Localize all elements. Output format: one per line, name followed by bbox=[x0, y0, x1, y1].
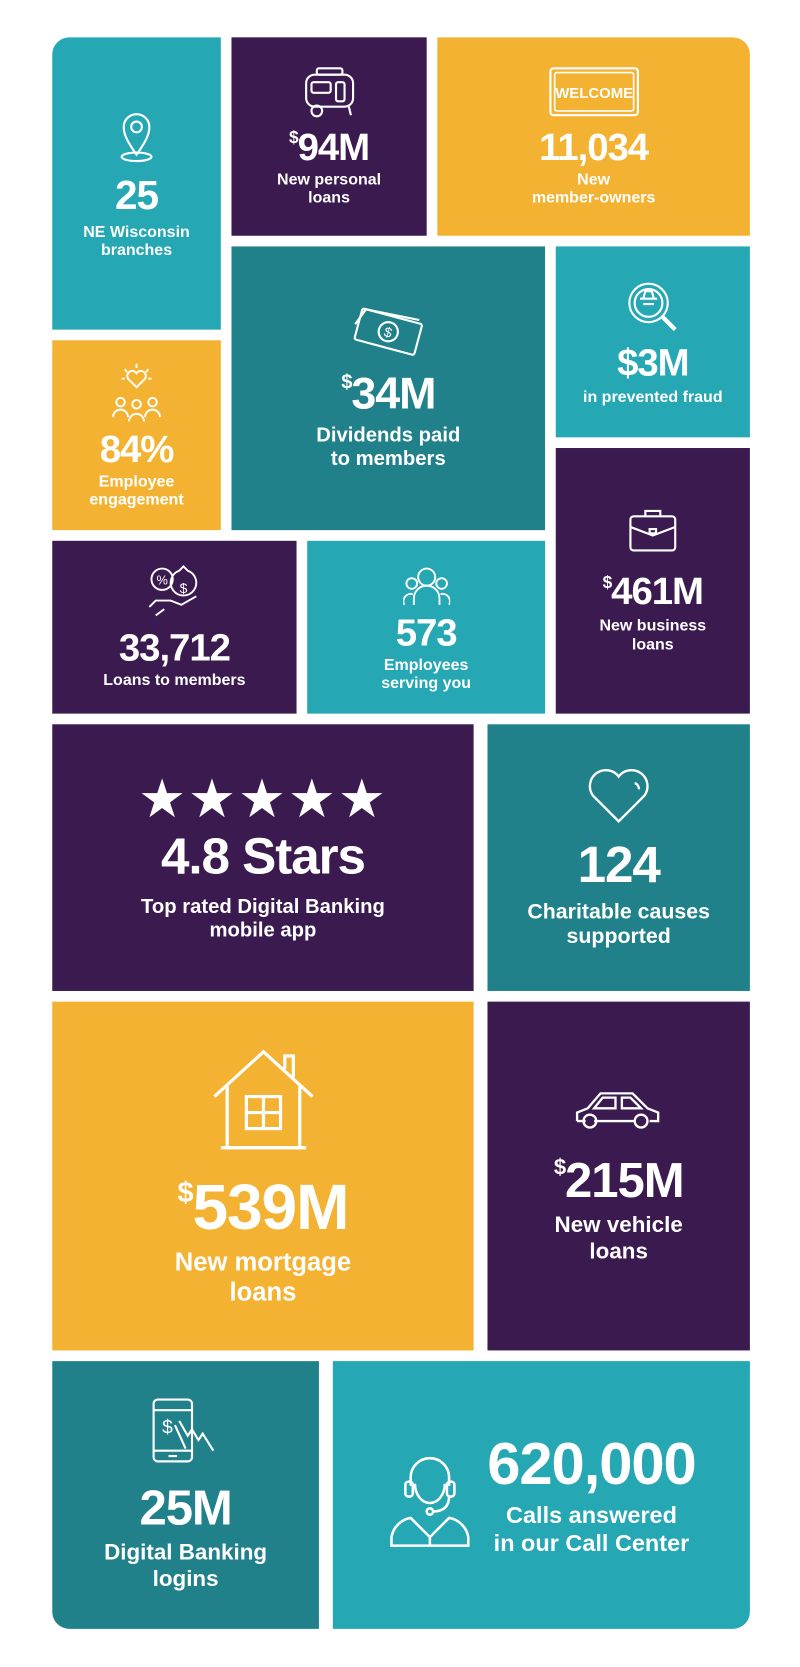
number: 33,712: 33,712 bbox=[119, 625, 230, 669]
icon: house bbox=[213, 1050, 314, 1150]
number: $94M: $94M bbox=[289, 125, 369, 168]
number: 573: 573 bbox=[396, 610, 457, 654]
panel: charitable causes bbox=[487, 724, 750, 991]
label: New personal bbox=[277, 170, 381, 189]
panel: digital logins bbox=[52, 1361, 319, 1629]
icon: camper bbox=[305, 67, 354, 118]
label: supported bbox=[567, 925, 671, 948]
label: Charitable causes bbox=[527, 900, 710, 924]
label: engagement bbox=[89, 491, 184, 509]
icon: heart bbox=[588, 769, 649, 823]
label: Top rated Digital Banking bbox=[141, 896, 385, 919]
label: New mortgage bbox=[175, 1248, 351, 1277]
icon: briefcase bbox=[629, 510, 676, 552]
number: $3M: $3M bbox=[617, 340, 689, 384]
text block bbox=[487, 1430, 696, 1556]
label: New business bbox=[599, 617, 706, 635]
panel: business loans bbox=[556, 448, 750, 714]
icon: money bag hand: $ bbox=[179, 580, 187, 596]
icon: group bbox=[403, 568, 450, 606]
number: $34M: $34M bbox=[341, 368, 435, 418]
icon: car bbox=[576, 1092, 660, 1129]
number: 84%: 84% bbox=[100, 426, 173, 470]
icon: phone tap: $ bbox=[162, 1418, 173, 1439]
label bbox=[175, 1248, 351, 1306]
label: in prevented fraud bbox=[583, 388, 723, 406]
panel: vehicle loans bbox=[487, 1002, 750, 1350]
number: 620,000: 620,000 bbox=[487, 1430, 696, 1497]
label bbox=[381, 656, 471, 692]
label bbox=[89, 472, 184, 509]
label: loans bbox=[632, 635, 674, 653]
label bbox=[494, 1502, 689, 1556]
icon: cash bbox=[354, 308, 423, 356]
icon: magnifier spy bbox=[628, 282, 677, 332]
panel: mortgage bbox=[52, 1002, 474, 1350]
panel: branches bbox=[52, 37, 221, 330]
label: Digital Banking bbox=[104, 1541, 267, 1565]
number: $461M: $461M bbox=[603, 569, 703, 613]
icon: welcome mat: WELCOME bbox=[555, 85, 633, 102]
label: loans bbox=[308, 189, 350, 207]
label: logins bbox=[153, 1566, 219, 1591]
panel: employee engagement bbox=[52, 340, 221, 530]
label: New vehicle bbox=[555, 1213, 683, 1238]
icon: heart team bbox=[112, 364, 161, 422]
icon: money bag hand: % bbox=[156, 573, 167, 588]
label: mobile app bbox=[209, 919, 316, 942]
number: 25: 25 bbox=[115, 174, 158, 218]
number: 4.8 Stars: 4.8 Stars bbox=[161, 829, 365, 886]
label: to members bbox=[331, 448, 446, 470]
label: member-owners bbox=[532, 189, 655, 207]
label: Employees bbox=[384, 656, 468, 674]
label: Calls answered bbox=[506, 1502, 677, 1529]
label bbox=[599, 617, 706, 653]
label: Employee bbox=[99, 472, 174, 490]
panel: app rating bbox=[52, 724, 474, 991]
label: serving you bbox=[381, 674, 471, 692]
icon: cash: $ bbox=[382, 324, 394, 341]
label: in our Call Center bbox=[494, 1529, 689, 1556]
label bbox=[316, 425, 460, 470]
label: Loans to members bbox=[103, 671, 246, 689]
label bbox=[277, 170, 381, 207]
label: Dividends paid bbox=[316, 425, 460, 447]
panel: dividends bbox=[231, 246, 545, 530]
label bbox=[555, 1213, 683, 1264]
icon: headset agent bbox=[390, 1456, 470, 1547]
number: 124: 124 bbox=[578, 837, 660, 894]
label: loans bbox=[230, 1277, 296, 1306]
icon: money bag hand bbox=[148, 565, 198, 616]
icon: location pin bbox=[120, 113, 152, 162]
label: branches bbox=[83, 223, 190, 259]
panel: fraud bbox=[556, 246, 750, 437]
number: $215M: $215M bbox=[554, 1152, 684, 1208]
number: 11,034: 11,034 bbox=[539, 125, 648, 168]
label: branches: NE Wisconsin bbox=[83, 223, 190, 241]
label bbox=[532, 170, 655, 207]
panel: personal loans bbox=[231, 37, 427, 236]
icon: phone tap bbox=[152, 1398, 214, 1462]
panel: new members bbox=[437, 37, 750, 236]
label bbox=[527, 900, 710, 948]
label: branches: branches bbox=[101, 241, 172, 259]
panel: loans to members bbox=[52, 541, 297, 714]
label bbox=[104, 1541, 267, 1591]
icon: welcome mat bbox=[549, 67, 639, 116]
label: loans bbox=[589, 1239, 648, 1264]
panel: calls answered bbox=[333, 1361, 750, 1629]
label bbox=[141, 896, 385, 942]
number: $539M: $539M bbox=[178, 1171, 348, 1243]
icon: five stars: ★★★★★ bbox=[138, 769, 388, 829]
number: 25M: 25M bbox=[139, 1480, 232, 1535]
label: New bbox=[577, 170, 610, 189]
panel: employees bbox=[307, 541, 545, 714]
